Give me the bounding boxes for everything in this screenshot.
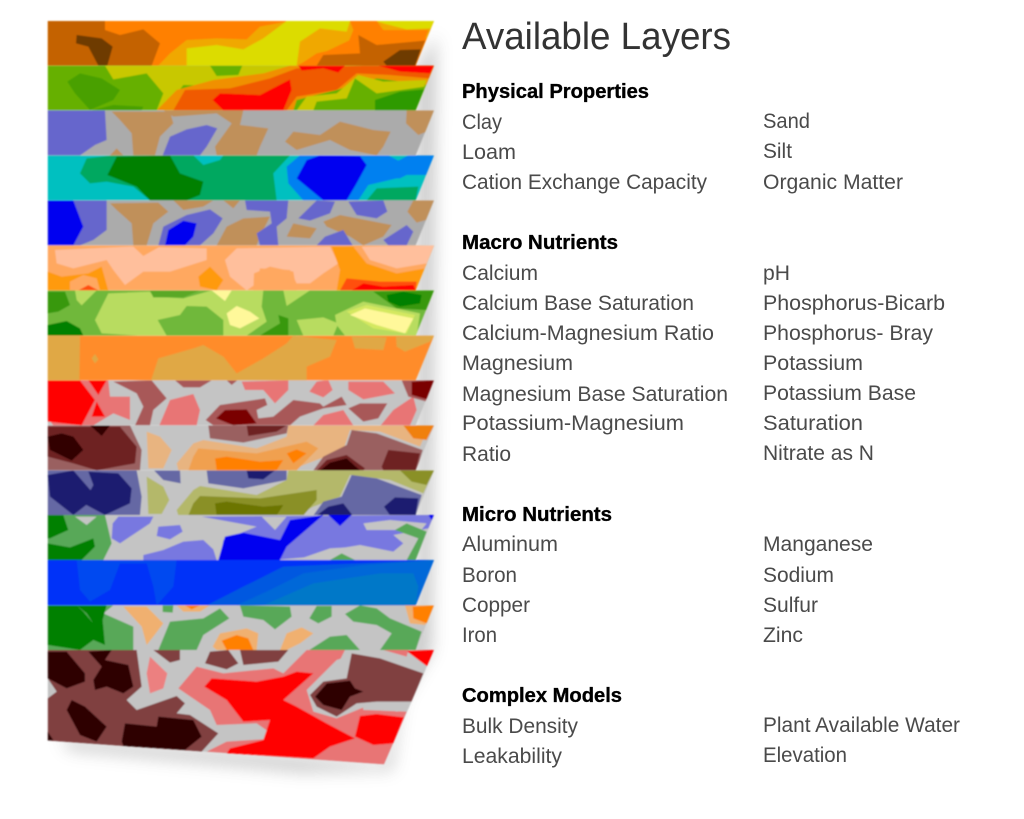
section: physical properties: Cation Exchange Capacity xyxy=(462,171,707,194)
title: Available Layers xyxy=(462,16,731,58)
section: macro nutrients: Magnesium Base Saturation xyxy=(462,383,728,406)
section: micro nutrients xyxy=(462,504,873,647)
layer stack shadow xyxy=(60,35,436,772)
section: macro nutrients: Potassium Base xyxy=(763,382,916,405)
band: 12 blue green gray xyxy=(47,514,437,561)
section: macro nutrients: Saturation xyxy=(763,412,863,435)
band: 4 teal green blue xyxy=(47,155,437,201)
band: 13 solid blue xyxy=(47,559,437,606)
heading: macro nutrients: Macro Nutrients xyxy=(462,232,618,254)
band: 15 bottom maroon red xyxy=(47,649,437,766)
section: physical properties: Sand xyxy=(763,110,810,133)
section: macro nutrients: Calcium Base Saturation xyxy=(462,292,694,315)
band: 3 blue brown gray xyxy=(47,109,437,156)
band: 11 navy olive gray xyxy=(47,470,437,516)
band: 6 peach orange xyxy=(47,245,437,291)
section: micro nutrients: Sulfur xyxy=(763,594,818,617)
section: physical properties: Organic Matter xyxy=(763,171,903,194)
section: micro nutrients: Aluminum xyxy=(462,533,558,556)
section: macro nutrients: Phosphorus-Bicarb xyxy=(763,292,945,315)
section: macro nutrients xyxy=(462,232,945,466)
section: macro nutrients: Potassium-Magnesium xyxy=(462,412,684,435)
section: micro nutrients: Zinc xyxy=(763,624,803,647)
layer stack xyxy=(47,20,437,766)
section: physical properties: Loam xyxy=(462,141,516,164)
section: complex models: Leakability xyxy=(462,745,562,768)
section: macro nutrients: Ratio xyxy=(462,443,511,466)
heading: micro nutrients: Micro Nutrients xyxy=(462,504,612,526)
section: macro nutrients: Calcium xyxy=(462,262,538,285)
section: physical properties: Silt xyxy=(763,140,792,163)
section: micro nutrients: Sodium xyxy=(763,564,834,587)
band: 9 red gray xyxy=(47,380,437,426)
section: complex models xyxy=(462,685,960,768)
band: 1 orange yellow xyxy=(47,20,437,67)
heading: physical properties: Physical Properties xyxy=(462,81,649,103)
section: micro nutrients: Manganese xyxy=(763,533,873,556)
band: 5 blue brown gray xyxy=(47,200,437,246)
heading: complex models: Complex Models xyxy=(462,685,622,707)
section: physical properties xyxy=(462,81,903,194)
section: macro nutrients: Magnesium xyxy=(462,352,573,375)
band: 10 maroon orange gray xyxy=(47,425,437,471)
section: macro nutrients: Phosphorus- Bray xyxy=(763,322,933,345)
band: 7 green yellow xyxy=(47,290,437,336)
section: macro nutrients: Nitrate as N xyxy=(763,442,874,465)
band: 8 orange tan xyxy=(47,335,437,382)
section: complex models: Bulk Density xyxy=(462,715,578,738)
section: complex models: Elevation xyxy=(763,744,847,767)
band: 14 green gray orange xyxy=(47,605,437,651)
section: micro nutrients: Copper xyxy=(462,594,530,617)
section: macro nutrients: Potassium xyxy=(763,352,863,375)
section: micro nutrients: Boron xyxy=(462,564,517,587)
section: micro nutrients: Iron xyxy=(462,624,497,647)
band: 2 green red xyxy=(47,65,437,112)
section: macro nutrients: Calcium-Magnesium Ratio xyxy=(462,322,714,345)
section: complex models: Plant Available Water xyxy=(763,714,960,737)
section: macro nutrients: pH xyxy=(763,262,790,285)
section: physical properties: Clay xyxy=(462,111,502,134)
